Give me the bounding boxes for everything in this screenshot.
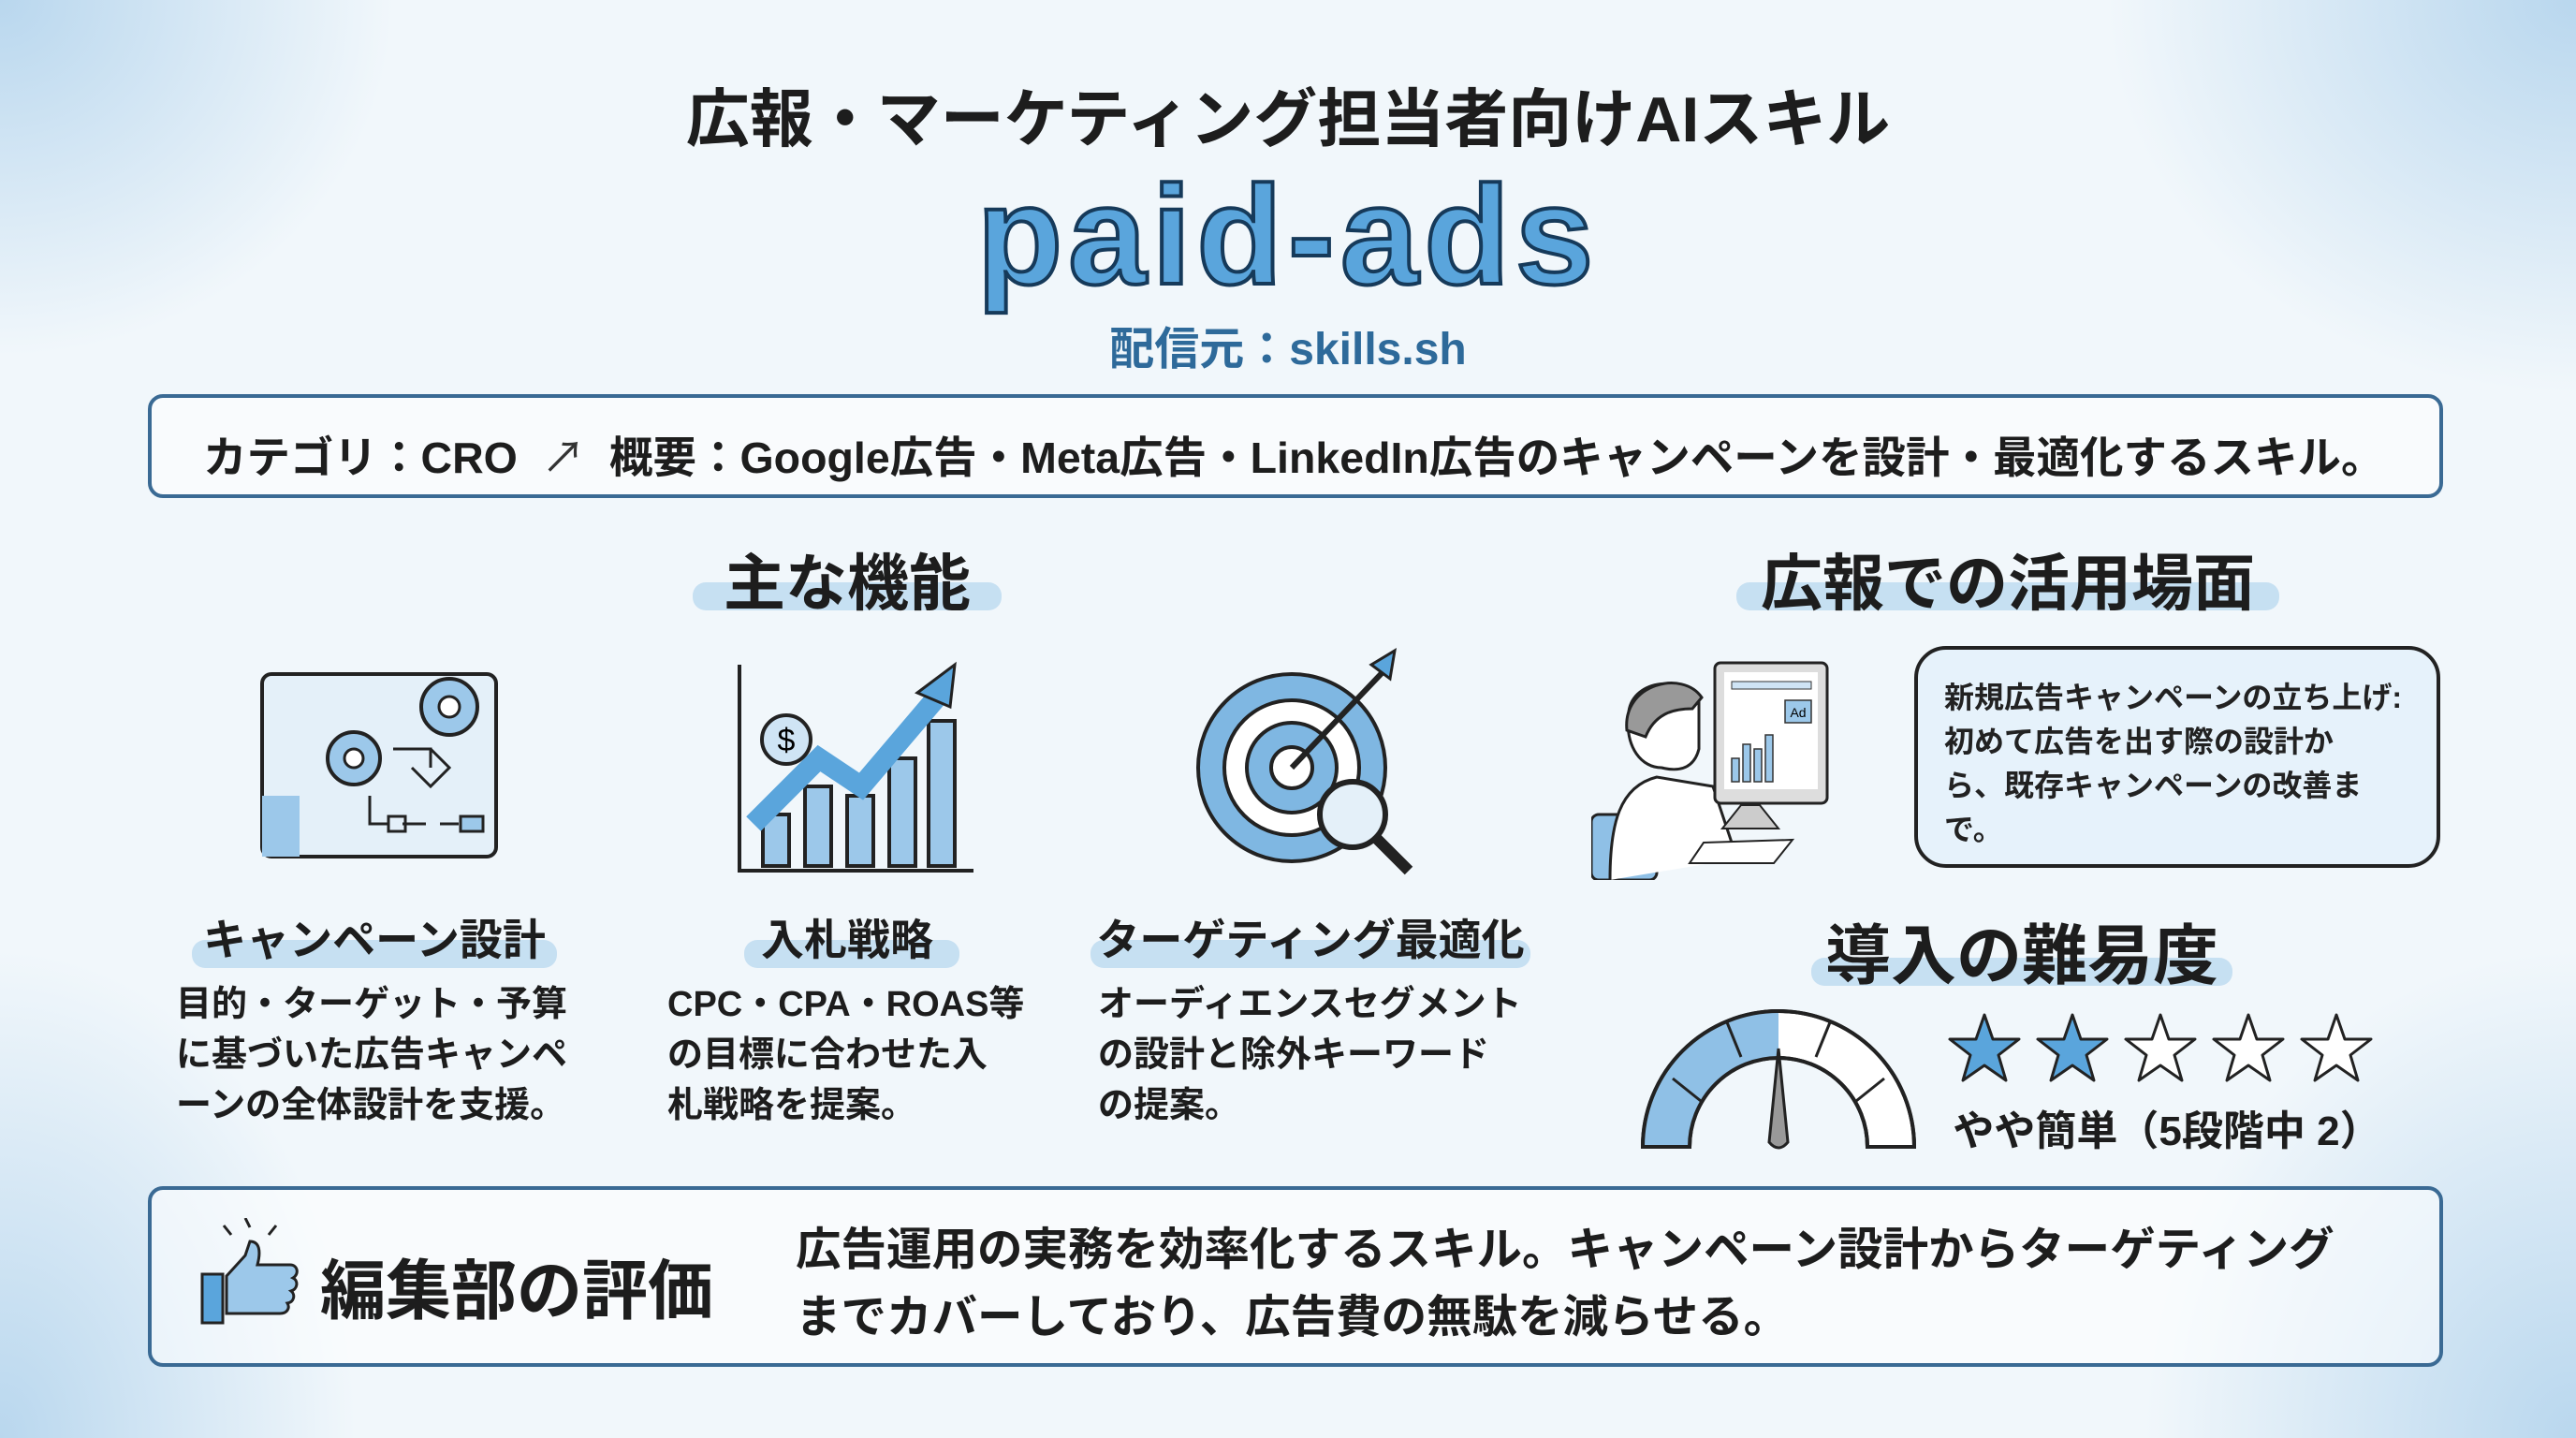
difficulty label: やや簡単（5段階中 2） [1953, 1108, 2381, 1154]
speech bubble [1914, 646, 2440, 868]
category text: カテゴリ：CRO ↗ 概要：Google広告・Meta広告・LinkedIn広告のキャンペーンを設計・最適化するスキル。 [203, 433, 2384, 482]
gauge [1641, 1009, 1916, 1150]
feature: targeting: ターゲティング最適化 [1096, 916, 1525, 964]
feature: bidding: CPC・CPA・ROAS等 [667, 985, 1024, 1024]
feature: bidding: 札戦略を提案。 [667, 1086, 916, 1125]
category box [148, 394, 2443, 498]
feature: campaign design: に基づいた広告キャンペ [176, 1035, 567, 1075]
review text: までカバーしており、広告費の無駄を減らせる。 [796, 1292, 1789, 1343]
bubble text: 新規広告キャンペーンの立ち上げ: [1944, 681, 2402, 714]
feature: campaign design [176, 916, 567, 1125]
stars rating [1948, 1013, 2372, 1082]
icon: bidding: $ [778, 723, 796, 758]
feature: campaign design: キャンペーン設計 [203, 916, 546, 964]
feature: targeting: の設計と除外キーワード [1098, 1035, 1489, 1075]
illustration: person at computer [1591, 661, 1829, 880]
icon: campaign design [260, 672, 498, 858]
icon: bidding [738, 661, 973, 873]
review text [796, 1225, 2334, 1343]
feature: campaign design: ーンの全体設計を支援。 [176, 1086, 565, 1125]
feature: campaign design: 目的・ターゲット・予算 [176, 985, 567, 1024]
feature: targeting: の提案。 [1098, 1086, 1240, 1125]
illustration: person at computer: Ad [1790, 705, 1807, 720]
source: 配信元：skills.sh [1109, 325, 1467, 374]
review text: 広告運用の実務を効率化するスキル。キャンペーン設計からターゲティング [796, 1225, 2334, 1275]
heading: features: 主な機能 [724, 549, 971, 618]
feature: bidding [667, 916, 1024, 1125]
bottom review box [148, 1186, 2443, 1367]
feature: targeting [1090, 916, 1530, 1125]
heading: difficulty: 導入の難易度 [1825, 919, 2218, 992]
bubble text: で。 [1944, 813, 2003, 846]
bubble text [1944, 681, 2402, 846]
skill name: paid-ads [977, 156, 1599, 314]
bubble text: ら、既存キャンペーンの改善ま [1944, 769, 2362, 802]
feature: bidding: の目標に合わせた入 [667, 1035, 988, 1075]
review heading: 編集部の評価 [320, 1255, 713, 1328]
title: 広報・マーケティング担当者向けAIスキル [686, 84, 1890, 155]
heading: usage: 広報での活用場面 [1761, 549, 2255, 618]
bubble text: 初めて広告を出す際の設計か [1944, 725, 2334, 758]
icon: thumbs up [200, 1218, 299, 1324]
feature: targeting: オーディエンスセグメント [1098, 985, 1522, 1024]
feature: bidding: 入札戦略 [761, 916, 933, 964]
icon: targeting [1196, 648, 1413, 874]
